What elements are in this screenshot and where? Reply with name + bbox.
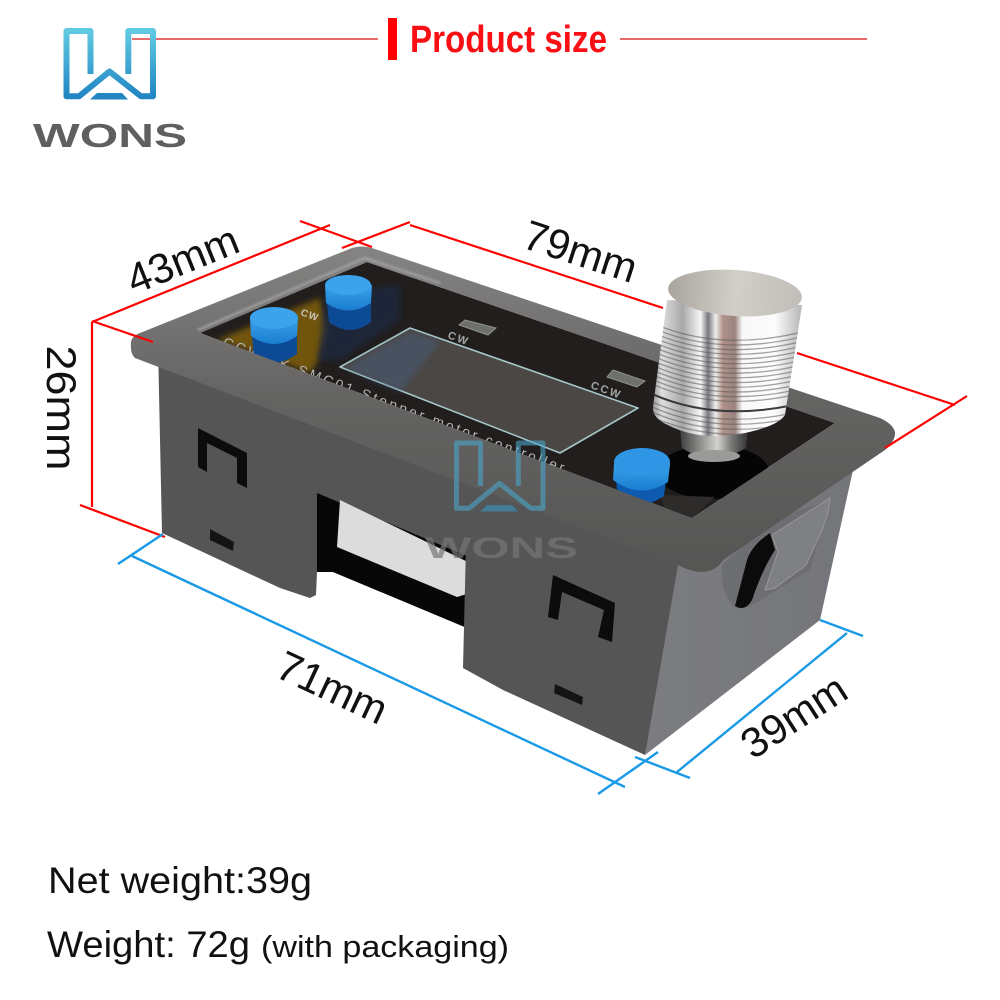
dimension: 71mm: 71mm: [270, 641, 395, 733]
dimension: 26mm: 26mm: [38, 346, 85, 470]
inner face panel: [200, 262, 835, 518]
side clip slot: [735, 533, 775, 608]
screen blue reflection: [345, 332, 440, 392]
logo: WONS: [33, 31, 187, 154]
CCW indicator: [607, 370, 645, 387]
front face left: [158, 345, 690, 755]
dimension: 39mm: [635, 620, 863, 778]
dimension: 79mm: 79mm: [518, 211, 643, 292]
knob black disc: [657, 445, 769, 499]
label CW: CW: [446, 330, 471, 348]
dimension: 79mm: [342, 211, 967, 448]
panel caption: CCW ZK-SMC01 Stepper motor controller: [221, 334, 567, 475]
knob stem: [680, 428, 748, 462]
label CCW: CCW: [589, 380, 623, 402]
label CW button: CW: [299, 307, 320, 324]
weight text: (with packaging): [261, 929, 509, 964]
net weight text: Net weight:39g: [48, 860, 312, 901]
bezel inner highlight: [198, 258, 440, 330]
button 1: [250, 307, 298, 363]
CW indicator: [459, 320, 496, 335]
weight text: Weight: 72g: [47, 924, 250, 965]
white terminal block: [337, 500, 470, 597]
dimension: 26mm: [38, 322, 165, 537]
front slot left: [198, 428, 247, 488]
right side face: [645, 470, 853, 755]
notch cavity: [317, 493, 467, 628]
dimension: 71mm: [118, 534, 658, 794]
watermark text: WONS: [425, 532, 578, 565]
dimension: 43mm: 43mm: [120, 216, 245, 303]
button 2: [325, 275, 372, 330]
small slot right: [554, 684, 583, 705]
gold printed area: [217, 298, 327, 373]
dimension: 43mm: [92, 216, 372, 342]
button 3: [613, 448, 670, 505]
dimension: 39mm: 39mm: [732, 665, 856, 768]
title: Product size: Product size: [410, 19, 607, 61]
device: stepper motor controller: [131, 246, 895, 755]
logo: WONS: WONS: [33, 117, 187, 154]
side clip recess: [722, 500, 830, 608]
small slot left: [210, 529, 234, 551]
ridged panel area: [660, 495, 715, 518]
knob body: [650, 300, 810, 436]
header rule left: [132, 38, 378, 40]
bezel frame: [131, 246, 895, 572]
front notch edge: [463, 545, 480, 672]
LCD screen: [340, 328, 638, 453]
header rule right: [620, 38, 867, 40]
side clip tab: [765, 498, 830, 590]
front slot right: [548, 575, 615, 642]
watermark logo: [456, 443, 543, 512]
blue sheen on panel: [318, 285, 400, 360]
weight text: [47, 924, 509, 965]
knob top face: [667, 265, 803, 321]
